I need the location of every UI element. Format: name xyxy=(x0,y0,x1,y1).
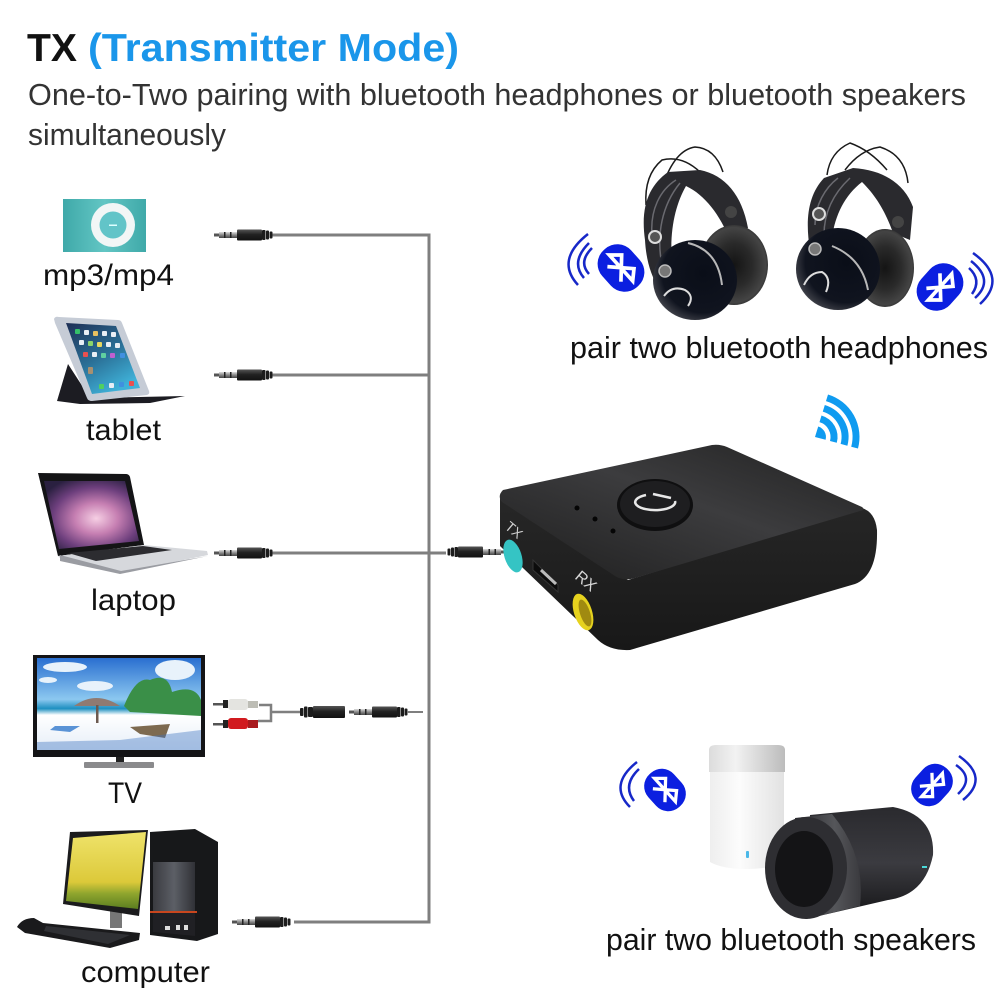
device top face xyxy=(500,445,864,579)
transmitter device xyxy=(500,445,877,650)
label: TX: TX xyxy=(502,518,527,542)
signal waves: speakers left xyxy=(621,762,639,807)
power button xyxy=(617,479,693,531)
plug: mp3 cable xyxy=(214,230,272,240)
cable bus xyxy=(272,235,446,922)
signal waves: headphones left xyxy=(569,234,592,285)
icon: TV xyxy=(33,655,205,768)
plug: laptop cable xyxy=(214,548,272,558)
label: computer: computer xyxy=(81,956,210,989)
label: TV: TV xyxy=(108,777,142,810)
icon: tablet xyxy=(54,317,185,404)
icon: laptop xyxy=(38,473,208,574)
port: TX xyxy=(500,537,526,575)
device body side xyxy=(500,496,877,650)
plug: computer cable xyxy=(232,916,290,928)
bluetooth badge: headphones right xyxy=(909,256,971,318)
icon: mp3 player xyxy=(63,199,146,252)
port: RX xyxy=(569,591,597,633)
headphones: left xyxy=(644,147,768,320)
subtitle line 1: One-to-Two pairing with bluetooth headphones or bluetooth speakers xyxy=(28,77,966,112)
signal waves: speakers right xyxy=(956,756,976,800)
port: micro USB xyxy=(533,560,558,592)
plug: tablet cable xyxy=(214,370,272,380)
label: tablet: tablet xyxy=(86,414,162,447)
icon: wifi signal xyxy=(815,398,856,448)
label: RX: RX xyxy=(571,568,600,596)
title: TX xyxy=(27,27,77,70)
subtitle line 2: simultaneously xyxy=(28,117,226,152)
signal waves: headphones right xyxy=(969,253,992,304)
label: mp3/mp4: mp3/mp4 xyxy=(43,259,174,292)
headphones: right xyxy=(796,143,914,310)
icon: desktop computer xyxy=(17,829,218,948)
bluetooth badge: speakers right xyxy=(904,757,960,813)
bluetooth badge: speakers left xyxy=(637,762,693,818)
title: (Transmitter Mode) xyxy=(88,27,459,70)
label: pair two bluetooth speakers: pair two bluetooth speakers xyxy=(606,922,976,957)
bluetooth badge: headphones left xyxy=(590,237,652,299)
label: pair two bluetooth headphones: pair two bluetooth headphones xyxy=(570,330,988,365)
status LEDs xyxy=(574,506,616,534)
label: laptop: laptop xyxy=(91,584,176,617)
speaker: black xyxy=(765,807,933,919)
RCA to 3.5mm adapter cable xyxy=(213,699,423,729)
plug: into transmitter xyxy=(448,546,506,558)
speaker: white xyxy=(709,745,785,869)
